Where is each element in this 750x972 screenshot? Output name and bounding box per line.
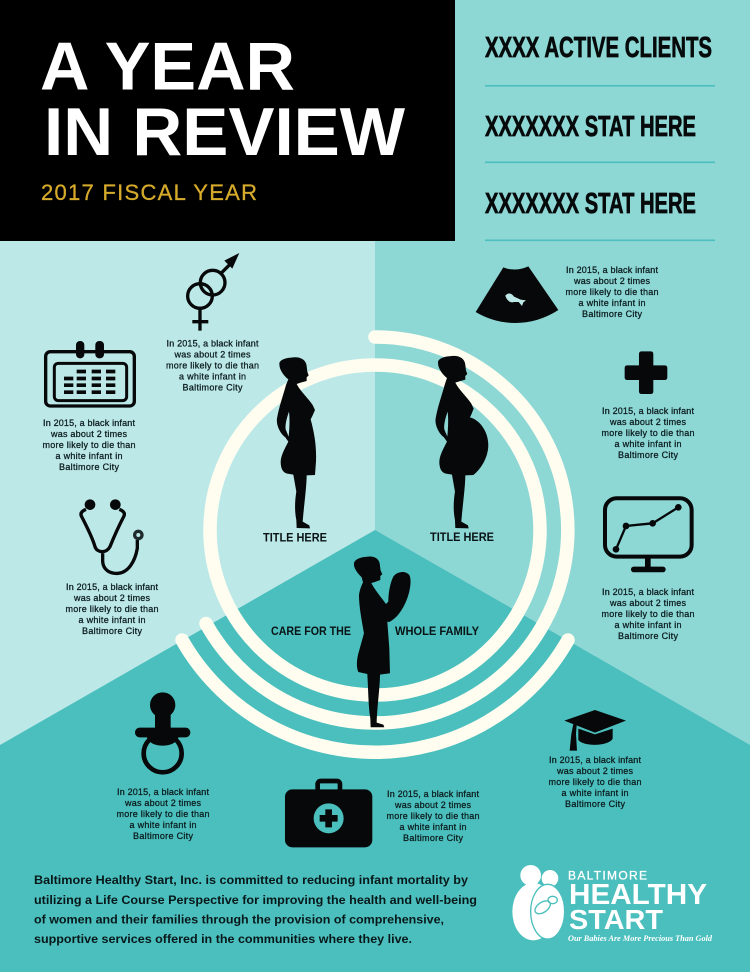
- text: plus block: Baltimore City: [618, 450, 678, 460]
- mission statement: utilizing a Life Course Perspective for improving the health and well-being: [34, 893, 477, 907]
- silhouette: pregnant woman: [435, 356, 488, 528]
- silhouette: woman: [277, 357, 316, 528]
- label: care for the: CARE FOR THE: [271, 626, 351, 638]
- text: calendar block: a white infant in: [56, 451, 122, 461]
- subtitle: 2017 FISCAL YEAR: [41, 180, 257, 205]
- text: pacifier block: a white infant in: [130, 820, 196, 830]
- text: calendar block: [42, 418, 136, 472]
- text: gender block: In 2015, a black infant: [166, 338, 259, 348]
- text: medical kit block: was about 2 times: [394, 800, 472, 810]
- icon: graduation cap: [564, 710, 626, 751]
- text: pacifier block: was about 2 times: [124, 798, 202, 808]
- text: monitor block: a white infant in: [614, 620, 682, 630]
- text: pacifier block: [116, 787, 210, 841]
- text: stethoscope block: more likely to die than: [66, 604, 158, 614]
- text: ultrasound block: a white infant in: [578, 298, 646, 308]
- text: gender block: Baltimore City: [182, 382, 243, 392]
- text: medical kit block: In 2015, a black infant: [387, 789, 479, 799]
- text: graduation cap block: was about 2 times: [556, 766, 634, 776]
- text: plus block: In 2015, a black infant: [602, 406, 694, 416]
- mission statement: [34, 873, 477, 946]
- stats panel: [455, 0, 750, 241]
- label: title here (right): TITLE HERE: [430, 532, 494, 544]
- text: graduation cap block: a white infant in: [562, 788, 628, 798]
- text: pacifier block: more likely to die than: [116, 809, 210, 819]
- text: calendar block: Baltimore City: [59, 462, 120, 472]
- icon: monitor with line chart: [605, 498, 692, 572]
- text: monitor block: Baltimore City: [618, 631, 678, 641]
- text: plus block: [602, 406, 694, 460]
- icon: pacifier: [135, 692, 190, 772]
- mission statement: Baltimore Healthy Start, Inc. is committed to reducing infant mortality by: [34, 873, 468, 887]
- text: stethoscope block: [66, 582, 158, 636]
- icon: stethoscope: [81, 499, 144, 573]
- icon: gender symbols: [188, 253, 239, 331]
- text: medical kit block: Baltimore City: [403, 833, 464, 843]
- label: whole family: WHOLE FAMILY: [395, 626, 479, 638]
- text: stethoscope block: In 2015, a black infant: [66, 582, 158, 592]
- logo: Baltimore Healthy Start: START: [569, 904, 663, 935]
- text: gender block: [166, 338, 259, 392]
- text: graduation cap block: [548, 755, 642, 809]
- text: monitor block: In 2015, a black infant: [602, 587, 694, 597]
- text: ultrasound block: more likely to die than: [566, 287, 658, 297]
- text: medical kit block: [386, 789, 480, 843]
- text: graduation cap block: Baltimore City: [565, 799, 626, 809]
- text: medical kit block: more likely to die than: [386, 811, 480, 821]
- title: [40, 28, 406, 170]
- text: monitor block: was about 2 times: [609, 598, 686, 608]
- mission statement: supportive services offered in the communities where they live.: [34, 932, 412, 946]
- icon: medical kit: [285, 781, 372, 847]
- logo: Baltimore Healthy Start: [512, 865, 713, 943]
- text: stethoscope block: was about 2 times: [73, 593, 150, 603]
- text: stethoscope block: a white infant in: [78, 615, 146, 625]
- mission statement: of women and their families through the provision of comprehensive,: [34, 912, 444, 926]
- text: monitor block: [602, 587, 694, 641]
- title: IN REVIEW: [44, 94, 406, 170]
- text: gender block: a white infant in: [179, 372, 246, 382]
- concentric rings: [182, 337, 568, 752]
- title: A YEAR: [40, 28, 295, 104]
- text: ultrasound block: [566, 265, 658, 319]
- header panel: [0, 0, 455, 241]
- text: ultrasound block: Baltimore City: [582, 309, 642, 319]
- text: gender block: more likely to die than: [166, 360, 259, 370]
- text: calendar block: was about 2 times: [50, 429, 128, 439]
- icon: calendar: [46, 341, 134, 406]
- logo: Baltimore Healthy Start: Our Babies Are More Precious Than Gold: [568, 933, 713, 943]
- text: medical kit block: a white infant in: [400, 822, 466, 832]
- text: ultrasound block: was about 2 times: [573, 276, 650, 286]
- logo: Baltimore Healthy Start: HEALTHY: [569, 879, 707, 911]
- silhouette: mother holding baby: [354, 557, 411, 727]
- icon: plus cross: [625, 351, 667, 394]
- icon: ultrasound: [476, 266, 558, 323]
- text: stethoscope block: Baltimore City: [82, 626, 142, 636]
- text: graduation cap block: more likely to die than: [548, 777, 642, 787]
- text: pacifier block: In 2015, a black infant: [117, 787, 209, 797]
- text: calendar block: more likely to die than: [42, 440, 136, 450]
- logo text: BALTIMORE: [568, 868, 647, 882]
- label: title here (left): TITLE HERE: [263, 532, 327, 544]
- text: graduation cap block: In 2015, a black infant: [549, 755, 641, 765]
- text: plus block: more likely to die than: [602, 428, 694, 438]
- text: calendar block: In 2015, a black infant: [43, 418, 135, 428]
- text: plus block: was about 2 times: [609, 417, 686, 427]
- text: plus block: a white infant in: [614, 439, 682, 449]
- logo mark: [512, 865, 565, 940]
- text: monitor block: more likely to die than: [602, 609, 694, 619]
- text: pacifier block: Baltimore City: [133, 831, 194, 841]
- text: gender block: was about 2 times: [174, 350, 251, 360]
- text: ultrasound block: In 2015, a black infant: [566, 265, 658, 275]
